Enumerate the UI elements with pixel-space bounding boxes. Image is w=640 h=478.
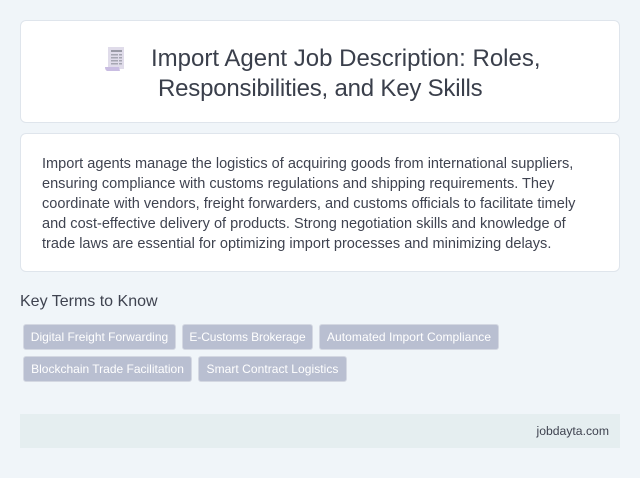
tag [319,324,499,350]
tag list [23,324,499,382]
footer [20,414,620,448]
text block: description: Import agents manage the logistics of acquiring goods from international suppliers, [42,156,573,172]
heading: key terms: Key Terms to Know [20,293,158,310]
title panel [20,20,620,123]
tag: E-Customs Brokerage [189,330,306,344]
panel: description [20,133,620,272]
tag [23,324,176,350]
tag: Smart Contract Logistics [207,362,338,376]
title [151,45,541,102]
text block: description: coordinate with vendors, freight forwarders, and customs officials to facilitate timely [42,196,575,212]
tag [198,356,347,382]
tag: Digital Freight Forwarding [31,330,168,344]
tag [182,324,313,350]
tag: Blockchain Trade Facilitation [31,362,184,376]
text block: description: and cost-effective delivery of products. Strong negotiation skills and knowledge of [42,216,566,232]
title: Responsibilities, and Key Skills [158,75,482,102]
tag [23,356,192,382]
title: Import Agent Job Description: Roles, [151,45,541,72]
text block: description: trade laws are essential for optimizing import processes and minimizing delays. [42,236,551,252]
footer source: jobdayta.com [536,424,609,438]
icon: document receipt [105,47,124,71]
tag: Automated Import Compliance [327,330,491,344]
text block: description: ensuring compliance with customs regulations and shipping requirements. They [42,176,554,192]
text block: description [42,156,576,252]
